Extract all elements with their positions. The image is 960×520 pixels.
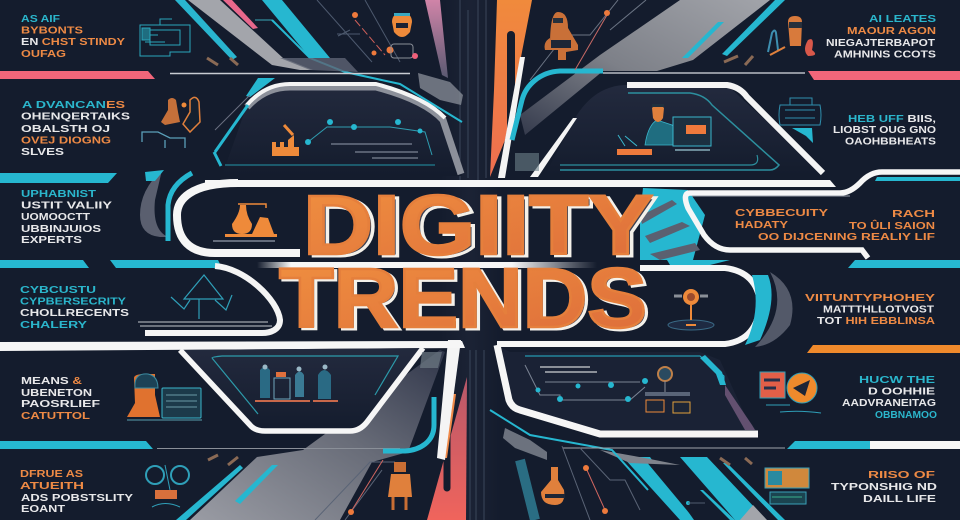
text block: bottom left: EOANT [21,503,66,515]
text block: how the: OBBNAMOO [875,409,937,421]
text block: virtual: MATTTHLLOTVOST [823,304,935,316]
title extrusion DIGIITY: DIGIITY [307,180,657,274]
text block: middle right: OO DIJCENING REALIY LIF [758,231,936,243]
icon: worker at computer [617,104,711,155]
text block: experts: UBBINJUIOS [21,223,101,235]
top-left diagonal stripes [170,0,463,122]
text block: cybersecurity: CYPBERSECRITY [20,296,126,308]
text block: upper right: LIOBST OUG GNO [833,124,936,136]
text block: how the: AADVRANEITAG [842,397,936,409]
text block: top right: AI LEATES [869,13,936,25]
text block: top left [21,13,125,60]
panel: upper right frame [515,85,823,177]
panel: cyan chevrons right of title [640,172,960,260]
icon: four people [255,364,338,401]
text block: rise of: TYPONSHIG ND [831,481,938,493]
panel: lower left frame [0,341,465,431]
icon: globe on device [645,367,690,413]
text block: upper right: OAOHBBHEATS [845,136,936,148]
text block: advancements: OVEJ DIOGNG [21,134,111,146]
lower-right diagonal stripes [490,410,785,520]
text block: cybersecurity [20,284,129,331]
panel: lower right frame [497,345,760,435]
title [279,178,657,347]
icon: vehicle outline [779,98,821,143]
icon: worker with data screen [545,12,578,60]
text block: cybersecurity: CYBCUSTU [20,284,96,296]
text block: means: UBENETON [21,387,92,399]
title word DIGIITY: DIGIITY [303,178,653,272]
text block: advancements: A DVANCAN ES [22,99,125,111]
text block: experts: EXPERTS [21,234,82,246]
icon: two people at a bench [142,97,200,148]
text block: top left: BYBONTS [21,24,83,36]
text block: top right [826,13,936,60]
icon: lab flasks [213,204,277,241]
text block: middle right: HADATY [735,219,788,231]
top-right diagonal stripes [490,0,805,178]
icon: person with goggles [391,13,418,59]
text block: top left: OUFAG [21,48,66,60]
text block: upper right [833,113,936,148]
text block: cybersecurity: CHALERY [20,319,87,331]
panel: upper left frame [214,78,462,176]
text block: advancements: OBALSTH OJ [21,123,110,135]
text block: how the: HUCW THE [859,374,935,386]
text block: top left: AS AIF [21,13,61,25]
text block: means: MEANS & [21,375,83,387]
text block: experts: UOMOOCTT [21,211,91,223]
text block: how the: D OOHHIE [868,386,935,398]
text block: upper right: HEB UFF BIIS, [848,113,936,125]
text block: middle right [735,207,936,243]
text block: means: CATUTTOL [21,410,91,422]
text block: experts [21,188,112,246]
icon: person with goggles lower [541,467,565,505]
text block: virtual: TOT HIH EBBLINSA [817,315,935,327]
title extrusion TRENDS: TRENDS [282,253,650,347]
text block: rise of: DAILL LIFE [863,493,936,505]
text block: top right: AMHNINS CCOTS [834,48,936,60]
text block: top right: MAOUR AGON [847,25,936,37]
icon: person with panels [768,16,815,56]
icon: circuit board [140,19,190,56]
icon: standing figure [388,462,412,510]
text block: top left: EN CHST STINDY [21,36,125,48]
text block: middle right: RACH [892,208,935,220]
text block: bottom left: ADS POBSTSLITY [21,492,133,504]
text block: how the [842,374,937,421]
panel: lower right title frame [497,260,792,347]
icon: globe gears [146,465,189,507]
icon: head with monitor [127,374,202,420]
text block: rise of [831,469,938,505]
text block: experts: USTIT VALIIY [21,200,112,212]
text block: rise of: RIISO OF [868,469,936,481]
panel: title frame [140,170,836,253]
text block: bottom left: ATUEITH [20,480,84,492]
title word TRENDS: TRENDS [279,251,647,345]
text block: virtual: VIITUNTYPHOHEY [805,292,935,304]
icon: lab bench with cone [272,125,299,156]
icon: triangular tent [171,275,232,319]
icon: monitor with orange disc [760,372,821,413]
text block: top right: NIEGAJTERBAPOT [826,37,936,49]
text block: middle right: TO ÛLI SAION [849,219,935,232]
text block: advancements: SLVES [21,146,64,158]
central vertical light streaks [440,0,500,520]
icon: round badge on stand [668,289,714,330]
text block: means: PAOSRLIEF [21,398,101,410]
text block: cybersecurity: CHOLLRECENTS [20,307,129,319]
text block: middle right: CYBBECUITY [735,207,828,219]
lower-left diagonal stripes [157,340,467,520]
text block: bottom left [20,468,133,515]
text block: experts: UPHABNIST [21,188,97,200]
text block: advancements [21,99,130,158]
accent bars [0,71,960,449]
icon: dashboards [765,468,809,504]
text block: bottom left: DFRUE AS [20,468,83,480]
text block: advancements: OHENQERTAIKS [21,110,130,122]
panel: lower left title frame [110,260,597,333]
text block: virtual [805,292,935,327]
text block: means [21,375,101,422]
